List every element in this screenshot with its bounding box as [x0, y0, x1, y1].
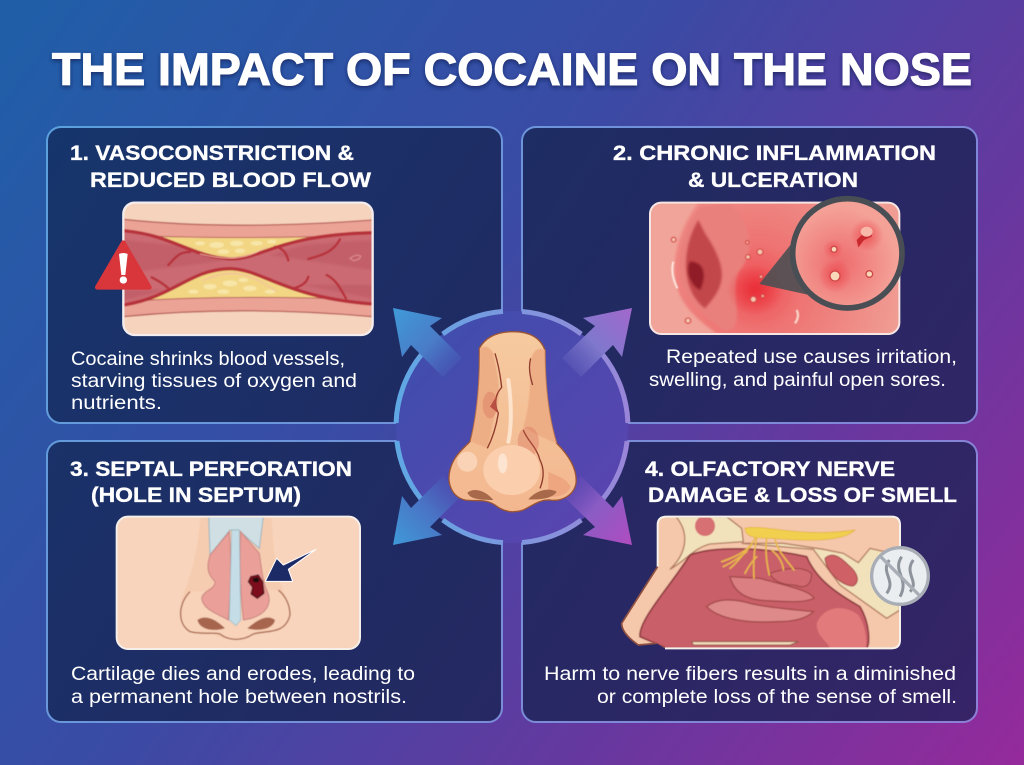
arrow: pointing to hole	[265, 549, 316, 581]
heading: vasoconstriction	[70, 142, 371, 192]
nose with fissures	[449, 332, 576, 512]
hub disc	[396, 311, 628, 543]
description: vasoconstriction: nutrients.	[71, 393, 162, 414]
heading: septal perforation	[70, 458, 352, 507]
heading: olfactory nerve damage: 4. OLFACTORY NERVE	[645, 458, 895, 481]
heading: septal perforation: 3. SEPTAL PERFORATION	[70, 458, 352, 481]
heading: vasoconstriction: REDUCED BLOOD FLOW	[90, 169, 371, 192]
panel: olfactory nerve damage	[522, 441, 977, 722]
icon: warning triangle	[97, 243, 149, 287]
illustration: narrowed blood vessel	[97, 203, 373, 335]
arrow: to panel 1	[393, 308, 462, 377]
illustration: ulcerated nasal lining	[650, 199, 902, 334]
heading: vasoconstriction: 1. VASOCONSTRICTION &	[70, 142, 354, 165]
description: septal perforation: a permanent hole between nostrils.	[71, 687, 407, 708]
description: olfactory nerve damage	[544, 664, 957, 708]
panel: inflammation	[522, 127, 977, 423]
description: olfactory nerve damage: Harm to nerve fibers results in a diminished	[544, 664, 956, 685]
arrow: to panel 3	[393, 476, 462, 545]
description: septal perforation	[71, 664, 415, 708]
heading: olfactory nerve damage: DAMAGE & LOSS OF SMELL	[648, 484, 957, 507]
hub ring segments	[396, 311, 628, 543]
description: vasoconstriction: starving tissues of oxygen and	[71, 371, 357, 392]
arrow: to panel 4	[562, 476, 632, 545]
description: vasoconstriction: Cocaine shrinks blood vessels,	[71, 349, 345, 370]
heading: septal perforation: (HOLE IN SEPTUM)	[91, 484, 301, 507]
illustration: septum hole	[117, 517, 360, 649]
description: inflammation: Repeated use causes irritation,	[666, 347, 957, 368]
description: septal perforation: Cartilage dies and erodes, leading to	[71, 664, 415, 685]
arrow: to panel 2	[562, 308, 632, 377]
panel: vasoconstriction	[47, 127, 502, 423]
magnifier with ulcers	[759, 199, 902, 308]
heading: olfactory nerve damage	[645, 458, 957, 507]
title: THE IMPACT OF COCAINE ON THE NOSE	[52, 44, 972, 95]
illustration: nasal cavity and olfactory nerve	[620, 515, 928, 650]
heading: inflammation: & ULCERATION	[688, 169, 858, 192]
heading: inflammation: 2. CHRONIC INFLAMMATION	[613, 142, 936, 165]
description: olfactory nerve damage: or complete loss of the sense of smell.	[597, 687, 957, 708]
icon: no smell	[872, 548, 928, 604]
central diagram	[393, 308, 632, 545]
heading: inflammation	[613, 142, 936, 192]
description: inflammation: swelling, and painful open sores.	[649, 370, 946, 391]
panel: septal perforation	[47, 441, 502, 722]
description: inflammation	[649, 347, 957, 391]
description: vasoconstriction	[71, 349, 357, 414]
